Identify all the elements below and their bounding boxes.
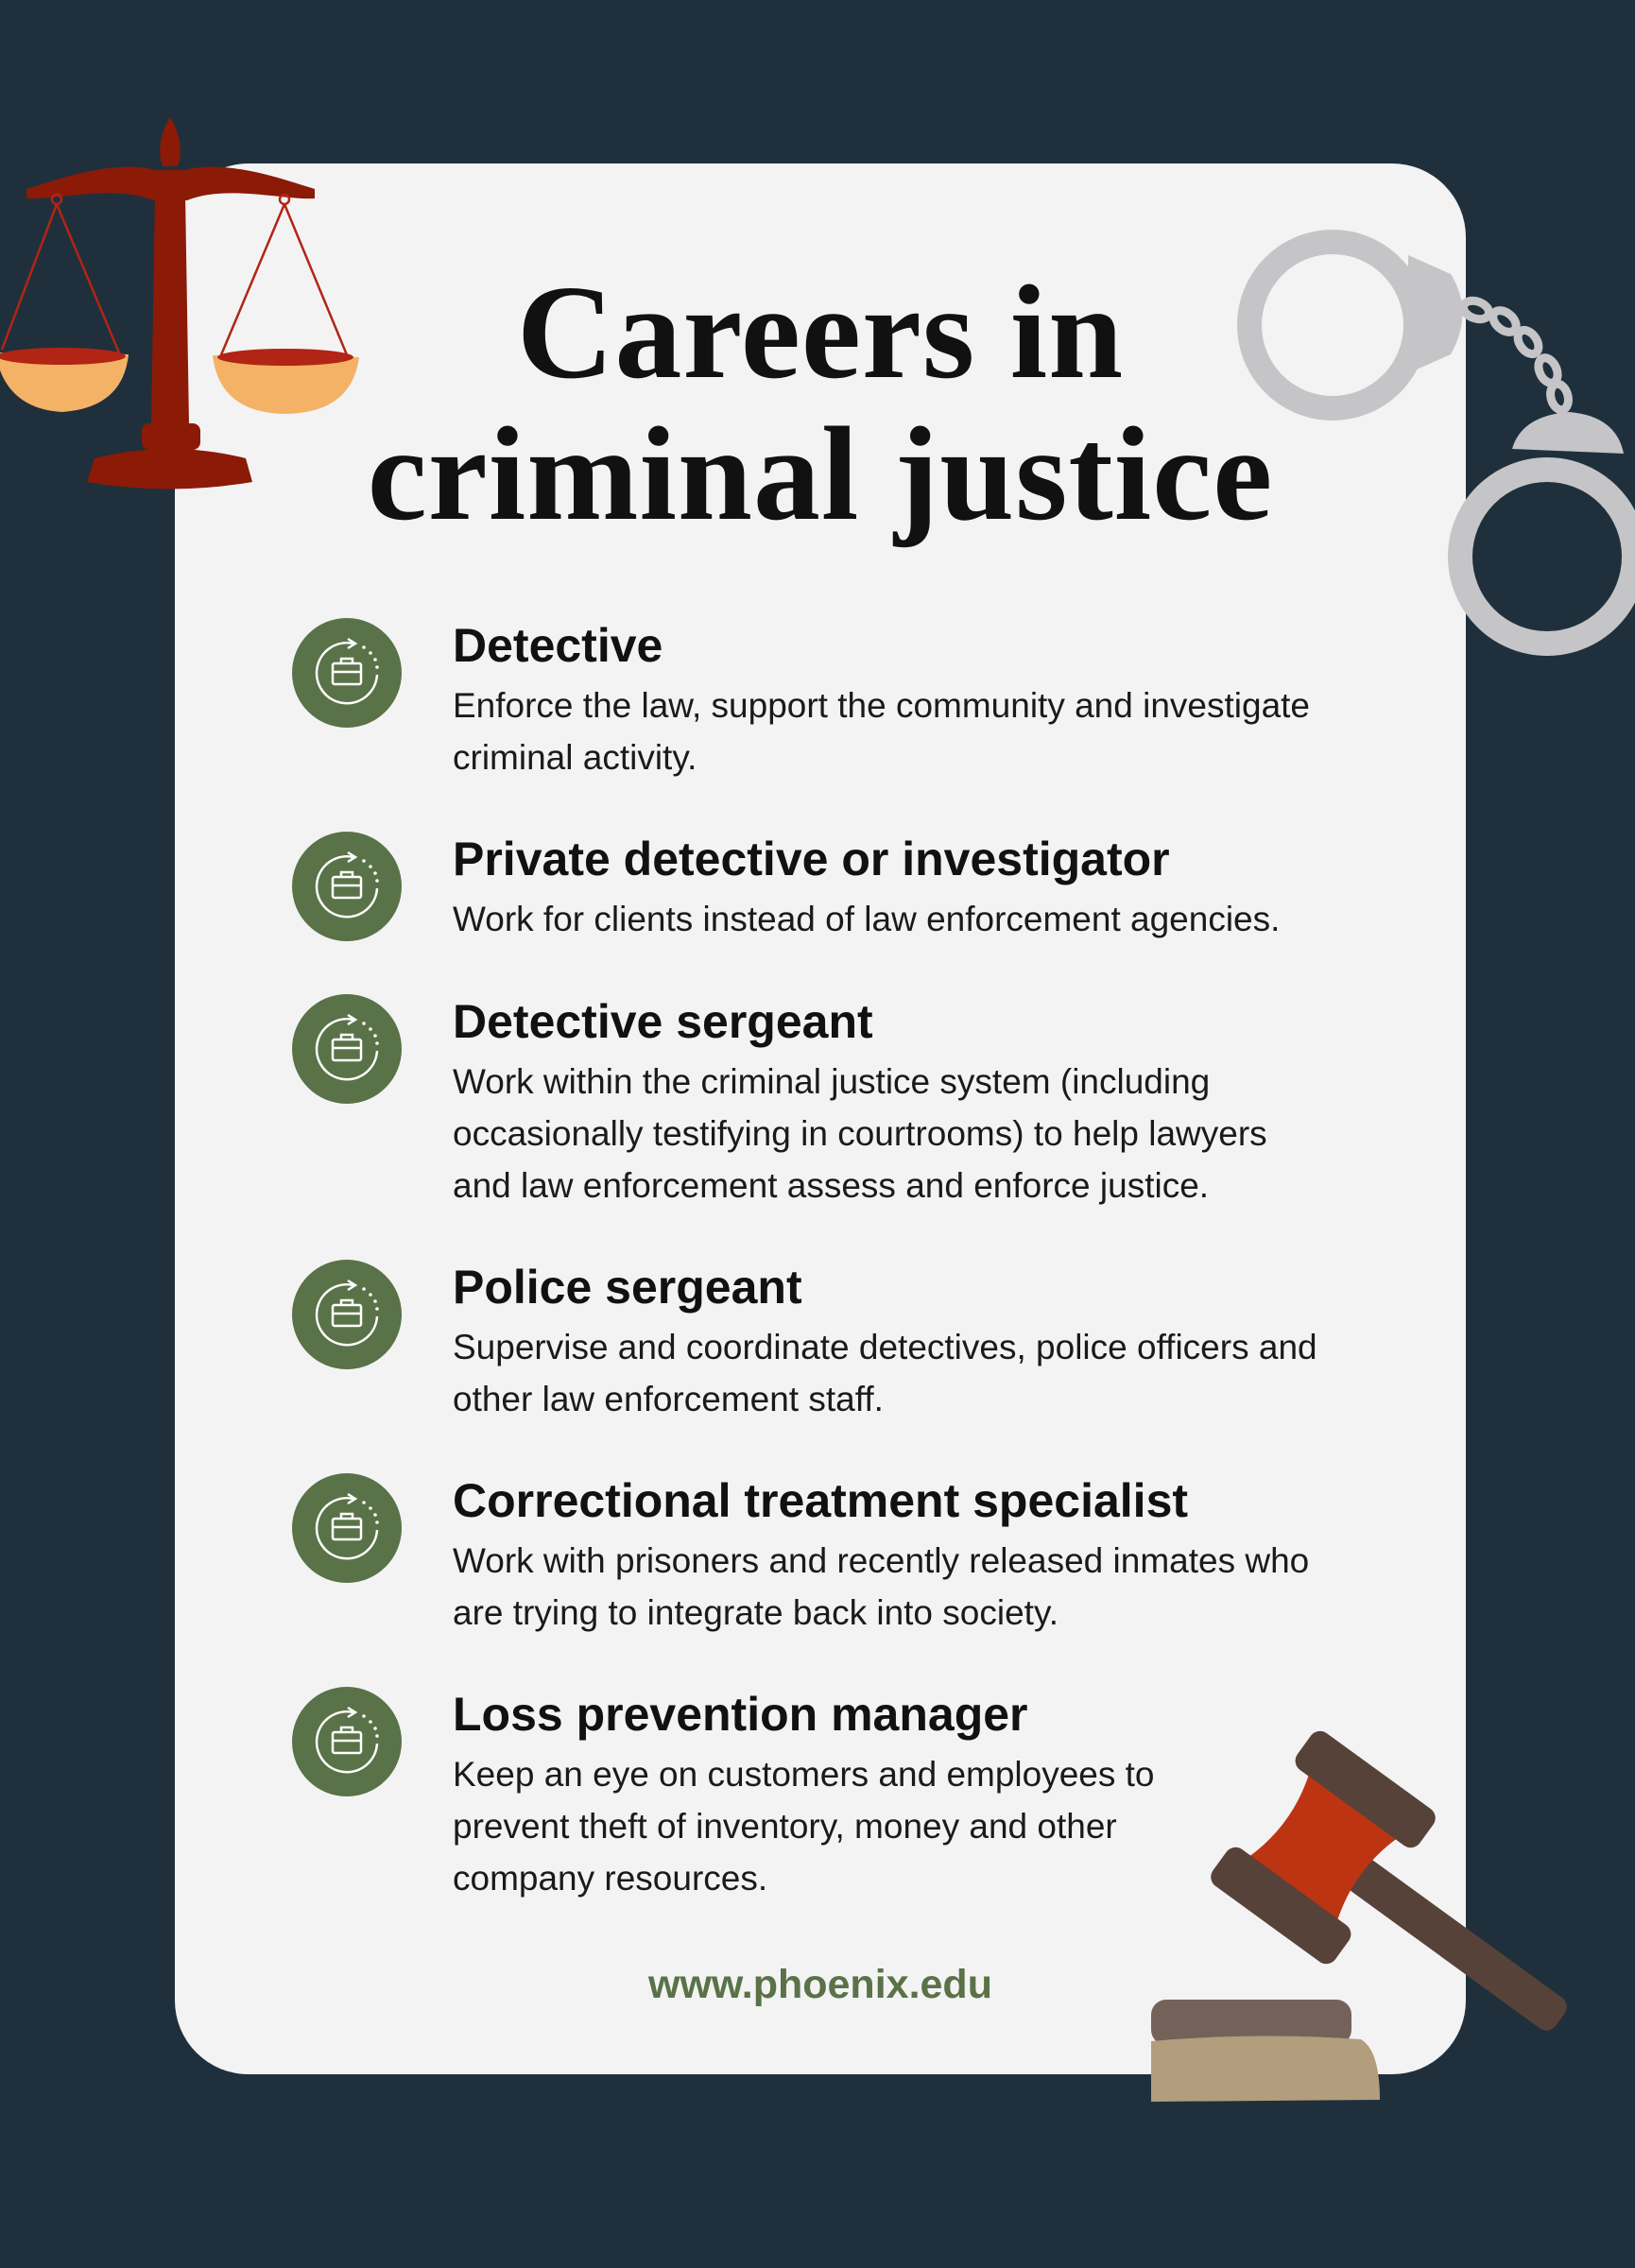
icon: gavel [1151, 1727, 1616, 2102]
text: Detective sergeant: Detective sergeant [453, 995, 873, 1048]
text: Correctional treatment specialist: Correctional treatment specialist [453, 1474, 1188, 1527]
item: Detective [292, 618, 1310, 777]
icon: briefcase cycle [292, 1260, 402, 1369]
icon: briefcase cycle [292, 994, 402, 1104]
icon: briefcase cycle [292, 832, 402, 941]
card panel [175, 163, 1466, 2074]
item: Private detective [292, 832, 1280, 941]
text: Police sergeant: Supervise and coordinate detectives, police officers and other law enforcement staff. [453, 1328, 1317, 1418]
text: Detective sergeant: and law enforcement assess and enforce justice. [453, 1166, 1209, 1205]
text: Private detective [453, 833, 1280, 938]
title [368, 257, 1273, 548]
text: Police sergeant [453, 1261, 1317, 1418]
icon: scales of justice [0, 117, 359, 490]
icon: briefcase cycle [292, 1473, 402, 1583]
text: Private detective: Private detective or investigator [453, 833, 1170, 885]
item: Loss prevention manager [292, 1687, 1155, 1898]
text: Loss prevention manager: Keep an eye on customers and employees to prevent theft of inventory, money and other company resources. [453, 1755, 1155, 1898]
item: Correctional treatment specialist [292, 1473, 1309, 1632]
item: Detective sergeant [292, 994, 1267, 1205]
text: Police sergeant: Police sergeant [453, 1261, 802, 1314]
icon: handcuffs [1249, 242, 1634, 644]
icon: briefcase cycle [292, 1687, 402, 1796]
url footer: www.phoenix.edu [648, 1962, 992, 2007]
text: Private detective: Work for clients instead of law enforcement agencies. [453, 900, 1280, 938]
text: Detective [453, 619, 1310, 777]
text: Detective: Enforce the law, support the community and investigate criminal activity. [453, 686, 1310, 777]
text: Correctional treatment specialist [453, 1474, 1309, 1632]
title: Careers in [517, 257, 1124, 406]
item: Police sergeant [292, 1260, 1317, 1418]
text: Loss prevention manager [453, 1688, 1155, 1898]
text: Loss prevention manager: Loss prevention manager [453, 1688, 1028, 1741]
text: Detective: Detective [453, 619, 663, 672]
text: Correctional treatment specialist: Work with prisoners and recently released inmates who are trying to integrate back into society. [453, 1541, 1309, 1632]
title: criminal justice [368, 399, 1273, 548]
text: Detective sergeant [453, 995, 1267, 1205]
icon: briefcase cycle [292, 618, 402, 728]
text: Detective sergeant: Work within the criminal justice system (including occasionally testifying in courtrooms) to help lawyers [453, 1062, 1267, 1153]
